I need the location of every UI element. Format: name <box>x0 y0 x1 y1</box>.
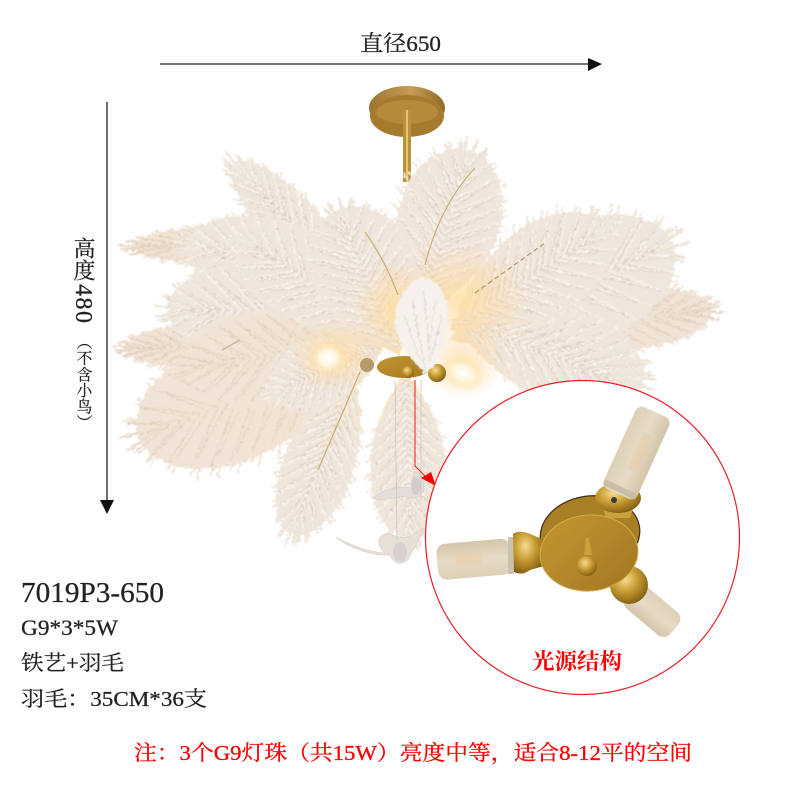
feather chandelier photo <box>98 86 729 563</box>
circle caption: 光源结构 <box>532 649 622 674</box>
red footnote: 注：3个G9灯珠（共15W）亮度中等，适合8-12平的空间 <box>134 741 692 766</box>
glowing bulbs <box>308 340 491 397</box>
front feather <box>395 277 448 374</box>
width dimension <box>160 31 602 71</box>
height arrow <box>100 102 114 514</box>
centre ball and finial <box>577 538 597 576</box>
height label: 高度 480 <box>70 237 96 324</box>
feather quills <box>222 168 545 470</box>
left frosted bulb <box>436 537 514 580</box>
gold back plate <box>535 489 645 579</box>
power spec: G9*3*5W <box>21 615 118 640</box>
top collar <box>595 483 641 518</box>
warm light glow <box>290 245 527 399</box>
hub with gold balls <box>360 356 446 382</box>
circle outline <box>426 380 740 694</box>
lower right collar <box>610 566 648 604</box>
ceiling mount and rod <box>369 86 445 182</box>
upper right frosted bulb <box>601 404 672 503</box>
left collar <box>513 532 544 574</box>
gold front plate <box>537 511 641 595</box>
glass bird lower <box>336 528 423 563</box>
width label: 直径650 <box>360 31 441 56</box>
width arrow <box>160 63 590 65</box>
ostrich feathers <box>98 119 729 562</box>
material spec: 铁艺+羽毛 <box>21 651 124 675</box>
model number: 7019P3-650 <box>21 577 164 609</box>
height note: （不含小鸟） <box>74 334 92 431</box>
feather spec: 羽毛：35CM*36支 <box>21 687 207 711</box>
hanging wire <box>395 380 421 540</box>
lower right frosted bulb <box>620 581 684 641</box>
glass bird upper <box>372 472 424 500</box>
red pointer arrow to detail circle <box>415 380 436 486</box>
detail circle: light source structure <box>426 380 740 694</box>
